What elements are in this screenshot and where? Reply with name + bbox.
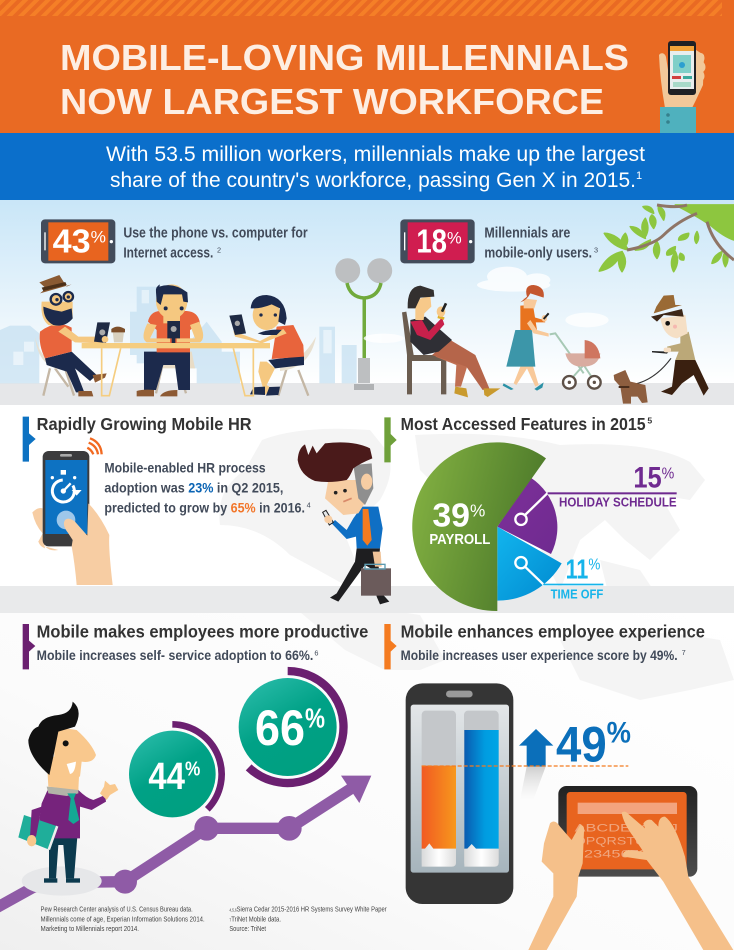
text: HR adoption: adoption was 23% in Q2 2015, <box>104 481 283 496</box>
heading: Most Accessed Features in 2015 <box>401 414 646 434</box>
panel: header <box>0 0 734 133</box>
icon: hand holding phone <box>659 41 706 133</box>
figure: man with notebook <box>18 702 118 896</box>
figure: walking businessman <box>298 442 391 604</box>
marker bar <box>384 417 397 462</box>
text: 18 percent device: % <box>447 228 462 247</box>
heading: 5 <box>647 415 652 425</box>
text: mobile-only users: 3 <box>594 246 598 255</box>
arrow: up 49 percent: 49 <box>556 717 607 773</box>
footnotes left <box>41 905 205 933</box>
label: holiday schedule 15 percent: % <box>662 465 675 482</box>
grey strip <box>0 586 734 613</box>
panel: phone usage left <box>0 219 357 396</box>
icon: stroller <box>550 333 601 389</box>
label: payroll 39 percent <box>429 498 490 548</box>
chair backs <box>43 368 308 396</box>
footnotes left: Millennials come of age, Experian Information Solutions 2014. <box>41 915 205 924</box>
icon: coffee cup <box>111 327 125 342</box>
text: HR adoption: predicted to grow by 65% in 2016. <box>104 501 305 516</box>
marker bar <box>23 417 36 462</box>
footnotes right: 7TriNet Mobile data. <box>229 915 281 924</box>
text: phone vs computer: Use the phone vs. computer for <box>123 226 308 242</box>
subtitle text: share of the country's workforce, passing Gen X in 2015. <box>110 169 636 192</box>
label: time off 11 percent: TIME OFF <box>551 586 603 601</box>
text: phone vs computer: Internet access. <box>123 246 213 262</box>
text: phone vs computer <box>123 226 308 262</box>
background: lower page <box>0 613 734 950</box>
panel: phone usage right <box>364 205 734 404</box>
skyline <box>0 287 357 383</box>
label: holiday schedule 15 percent: HOLIDAY SCHEDULE <box>559 495 677 510</box>
figure: man in chair <box>402 286 500 397</box>
chart: 44 percent ring: 44 <box>148 755 186 798</box>
label: payroll 39 percent: % <box>470 501 485 521</box>
text: 43 percent device: 43 <box>53 223 91 260</box>
subheading: 7 <box>682 648 686 657</box>
table <box>82 343 270 396</box>
panel: street scene background <box>0 200 734 405</box>
icon: tablet with hands: OPQRSTUVWX <box>575 835 679 847</box>
figure: woman with stroller <box>503 285 549 391</box>
marker bar <box>384 624 397 669</box>
marker bar <box>23 624 35 669</box>
text: 18 percent device <box>400 219 475 263</box>
label: time off 11 percent: % <box>588 556 601 573</box>
text: HR adoption <box>104 460 311 516</box>
label: time off 11 percent <box>543 553 603 601</box>
text: HR adoption: 4 <box>307 501 311 510</box>
subheading: Mobile increases self- service adoption to 66%. <box>37 648 313 663</box>
clouds <box>364 267 609 343</box>
figure: woman <box>229 295 304 396</box>
figure: man with hat <box>651 295 709 396</box>
icon: dog on leash <box>614 358 671 404</box>
text: mobile-only users: Millennials are <box>484 226 570 242</box>
footnotes left: Marketing to Millennials report 2014. <box>41 924 139 933</box>
label: holiday schedule 15 percent: 15 <box>633 462 662 495</box>
figure: bearded man <box>39 275 110 396</box>
label: payroll 39 percent: 39 <box>432 498 470 535</box>
footnotes left: Pew Research Center analysis of U.S. Census Bureau data. <box>41 905 193 914</box>
subtitle text: 1 <box>636 170 642 182</box>
icon: phone bar chart <box>406 683 513 904</box>
icon: tree branch <box>599 205 734 272</box>
icon: tablet with hands: 12345678 <box>575 848 648 860</box>
label: time off 11 percent: 11 <box>566 553 588 584</box>
label: payroll 39 percent: PAYROLL <box>429 532 490 548</box>
chart: 44 percent ring: % <box>185 758 200 781</box>
subheading: Mobile increases user experience score by 49%. <box>401 648 678 663</box>
chart: 44 percent ring <box>129 724 222 817</box>
title <box>60 37 629 122</box>
pie chart <box>412 442 677 611</box>
panel: more productive <box>0 621 387 933</box>
slice: payroll <box>412 442 546 611</box>
icon: wifi waves <box>87 438 102 454</box>
icon: tablet with hands <box>528 786 733 950</box>
text: 43 percent device: % <box>91 227 106 246</box>
heading: Mobile enhances employee experience <box>401 621 705 641</box>
chart: 66 percent ring <box>239 671 344 783</box>
chart: 66 percent ring: 66 <box>255 700 305 756</box>
slice: time off <box>497 527 562 601</box>
street lamp <box>335 258 392 390</box>
text: 18 percent device: 18 <box>416 223 447 260</box>
arrow: up 49 percent <box>422 717 631 800</box>
footnotes right: Source: TriNet <box>229 924 267 933</box>
icon: hand with phone <box>32 451 113 585</box>
text: phone vs computer: 2 <box>217 246 221 255</box>
footnotes right <box>229 905 387 933</box>
text: mobile-only users <box>484 226 598 262</box>
heading: Rapidly Growing Mobile HR <box>37 414 252 434</box>
label: holiday schedule 15 percent <box>548 462 677 510</box>
subheading: 6 <box>314 649 318 658</box>
pins <box>515 493 547 584</box>
title: MOBILE-LOVING MILLENNIALS <box>60 37 629 78</box>
footnotes right: 4,5,6Sierra Cedar 2015-2016 HR Systems Survey White Paper <box>229 905 387 914</box>
panel: most accessed features <box>384 414 677 611</box>
subtitle text <box>106 143 645 192</box>
icon: tablet with hands: ABCDEFGHIJ <box>575 823 678 835</box>
arrow: up 49 percent: % <box>607 717 631 750</box>
subtitle text: With 53.5 million workers, millennials make up the largest <box>106 143 645 166</box>
text: 43 percent device <box>41 219 115 263</box>
heading: Mobile makes employees more productive <box>37 621 368 641</box>
text: mobile-only users: mobile-only users. <box>484 246 592 262</box>
panel: subtitle band <box>0 133 734 200</box>
slice: holiday schedule <box>497 478 557 554</box>
figure: centre man <box>137 284 203 396</box>
text: HR adoption: Mobile-enabled HR process <box>104 460 266 475</box>
chart: 66 percent ring: % <box>305 702 325 733</box>
world map <box>219 429 734 700</box>
title: NOW LARGEST WORKFORCE <box>60 81 604 122</box>
panel: rapidly growing mobile HR <box>23 414 391 604</box>
arrow: growth line <box>0 776 371 908</box>
panel: employee experience <box>384 621 733 950</box>
